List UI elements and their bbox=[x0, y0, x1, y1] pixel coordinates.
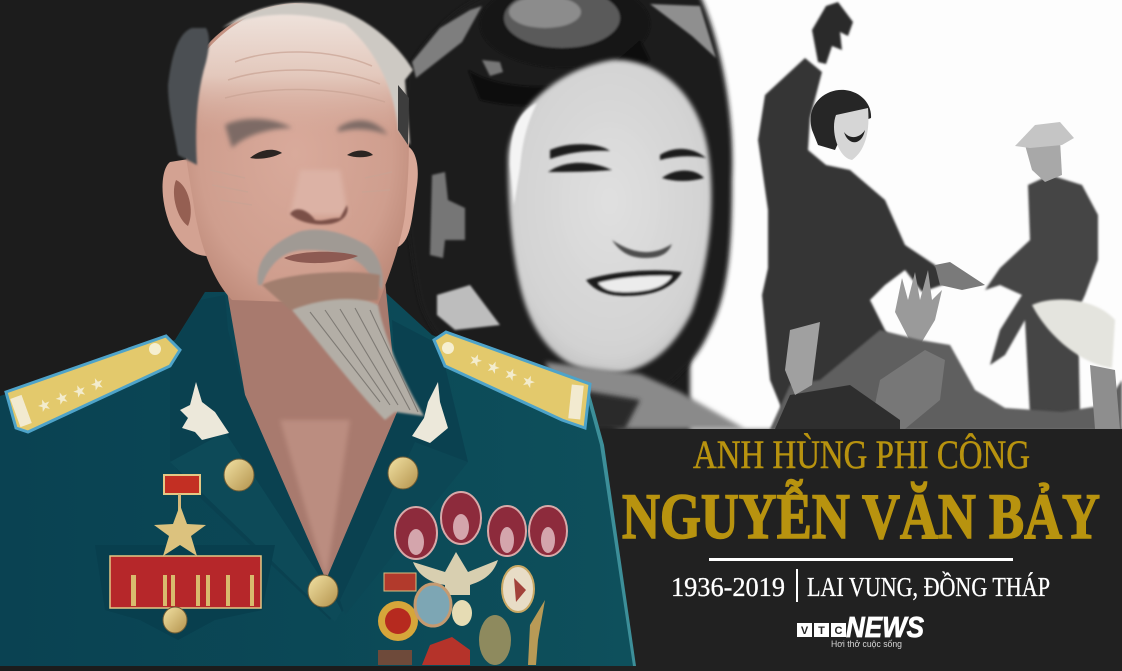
jacket bbox=[0, 292, 635, 666]
separator bbox=[796, 569, 798, 602]
gold buttons bbox=[163, 457, 418, 633]
eyes bbox=[250, 150, 282, 159]
pilot features bbox=[548, 144, 706, 296]
pith helmet bbox=[1032, 300, 1115, 368]
text: hometown: LAI VUNG, ĐỒNG THÁP bbox=[807, 571, 1050, 602]
pocket flap bbox=[95, 545, 275, 640]
hair left bbox=[168, 28, 209, 165]
raised hand bbox=[895, 270, 942, 345]
logo: VTC News: C bbox=[835, 625, 843, 637]
right epaulette: ★★★★ bbox=[467, 351, 543, 393]
title panel bbox=[590, 429, 1122, 671]
logo: VTC News bbox=[797, 612, 925, 649]
forehead bbox=[193, 4, 396, 135]
raised glove bbox=[812, 2, 853, 64]
chest skin V bbox=[225, 280, 398, 580]
ribbon bar bbox=[110, 556, 261, 608]
hair top and right bbox=[222, 3, 413, 145]
goggles bbox=[468, 0, 716, 106]
logo: VTC News: V bbox=[801, 625, 809, 637]
face bbox=[182, 3, 409, 305]
chin beard bbox=[262, 272, 380, 310]
helmet strap edge bbox=[510, 103, 537, 205]
right epaulette bbox=[434, 332, 590, 428]
pilot neck and collar bbox=[545, 362, 745, 429]
right collar wing bbox=[412, 382, 448, 443]
crowd and aircraft bbox=[770, 330, 1122, 430]
left lapel bbox=[170, 295, 342, 620]
assorted medals bbox=[378, 566, 545, 665]
handshake bbox=[935, 262, 985, 290]
logo: VTC News: Hơi thở cuộc sống bbox=[831, 639, 902, 649]
pilot flying helmet bbox=[404, 0, 732, 400]
old hero portrait bbox=[0, 3, 636, 666]
hero medal bbox=[154, 475, 206, 556]
text: lifespan: 1936-2019 bbox=[671, 572, 785, 602]
heading: subtitle: ANH HÙNG PHI CÔNG bbox=[693, 432, 1030, 477]
photo: young pilot portrait bbox=[404, 0, 745, 429]
photo: celebrating pilot and crowd bbox=[758, 2, 1122, 430]
man head and cap bbox=[1015, 122, 1074, 182]
grey helmet patches bbox=[412, 6, 500, 330]
nose bbox=[290, 205, 348, 225]
pilot face bbox=[508, 60, 711, 374]
pilot body and raised arm bbox=[758, 58, 948, 429]
logo: VTC News: T bbox=[818, 625, 825, 637]
mouth bbox=[284, 252, 358, 263]
pilot wings badge bbox=[413, 552, 498, 595]
left epaulette: ★★★★ bbox=[36, 372, 112, 415]
photo: white backdrop bbox=[690, 0, 1122, 430]
badge highlights bbox=[408, 514, 555, 555]
logo: VTC News: NEWS bbox=[846, 612, 925, 644]
divider rule bbox=[709, 558, 1013, 561]
saluting man bbox=[985, 175, 1098, 415]
left epaulette bbox=[6, 336, 180, 432]
ears bbox=[162, 158, 215, 256]
head bbox=[162, 3, 424, 420]
forehead wrinkles bbox=[210, 52, 392, 205]
goatee bbox=[292, 299, 424, 420]
red emblem badges bbox=[395, 492, 567, 559]
moustache bbox=[258, 230, 383, 290]
pilot helmet bbox=[811, 90, 871, 150]
right shoulder highlight bbox=[587, 394, 636, 666]
left collar wing bbox=[180, 382, 229, 440]
right lapel bbox=[326, 320, 468, 612]
facial shading bbox=[225, 119, 388, 215]
pilot face small bbox=[834, 108, 868, 160]
